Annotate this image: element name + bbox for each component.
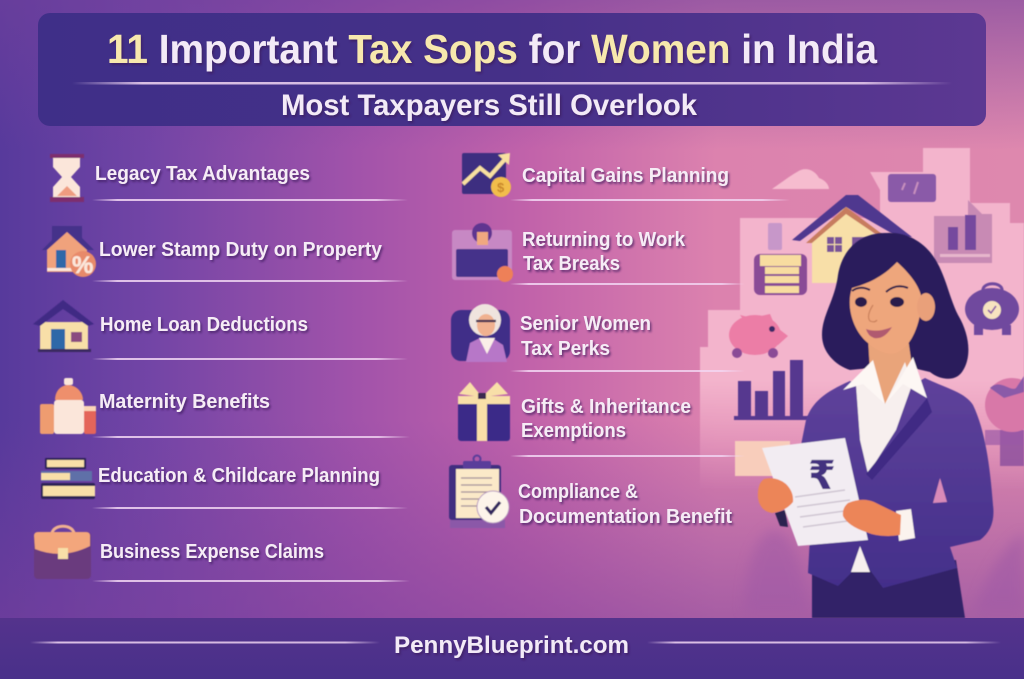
- label: legacy tax advantages: Legacy Tax Advantages: [95, 162, 310, 185]
- right hand: [843, 500, 901, 536]
- label: senior women: Tax Perks: [521, 337, 610, 360]
- icon: growth chart with coin: [462, 153, 511, 197]
- icon: cloud: [772, 169, 829, 189]
- icon: gift: [458, 382, 510, 441]
- woman illustration: [758, 233, 993, 618]
- nose: [869, 305, 877, 322]
- label: returning to work: [522, 228, 686, 275]
- label: compliance and documentation: Compliance &: [518, 480, 638, 503]
- icon: document stack: [754, 223, 807, 295]
- label: capital gains planning: Capital Gains Planning: [522, 164, 729, 187]
- icon: books: [41, 458, 95, 499]
- subtitle: Most Taxpayers Still Overlook: [281, 89, 697, 122]
- footer text: PennyBlueprint.com: [394, 632, 629, 659]
- cuff: [896, 509, 915, 541]
- icon: home: [33, 300, 94, 352]
- background scene: pale city shapes: [700, 148, 1024, 613]
- icon: baby bottle and items: [40, 378, 96, 434]
- title: 11 Important Tax Sops for Women in India: [107, 26, 878, 72]
- label: maternity benefits: Maternity Benefits: [99, 390, 270, 413]
- icon: tree with bird: [985, 376, 1024, 466]
- dividers: [92, 199, 790, 582]
- neck: [868, 338, 912, 404]
- left sleeve end: [775, 510, 788, 527]
- icon: growth chart with coin: $: [497, 180, 505, 195]
- icon: bar chart card: [934, 200, 992, 263]
- lower shirt: [851, 546, 870, 572]
- jacket: [800, 378, 993, 588]
- label: education and childcare: Education & Childcare Planning: [98, 464, 380, 487]
- icon: working woman with briefcase: [452, 223, 513, 282]
- trousers: [812, 560, 965, 618]
- label: gifts and inheritance: Exemptions: [521, 419, 626, 442]
- icon: calendar: [888, 174, 936, 202]
- icon: clipboard with check: [449, 456, 509, 528]
- brows: [852, 286, 908, 292]
- lapel: [866, 398, 932, 480]
- icon: piggy bank: [729, 314, 788, 358]
- icon: house with percent: %: [72, 252, 93, 279]
- icon: hourglass: [50, 154, 84, 202]
- label: senior women: [520, 312, 651, 360]
- icon: bar chart: [734, 360, 809, 420]
- document: [762, 438, 868, 546]
- icon: money bag with clock: [965, 284, 1019, 335]
- label: returning to work: Returning to Work: [522, 228, 686, 251]
- label: gifts and inheritance: [521, 395, 691, 442]
- face: [850, 262, 922, 354]
- label: returning to work: Tax Breaks: [523, 252, 620, 275]
- jacket arm gap: [933, 478, 947, 503]
- icon: house with percent: [42, 226, 96, 279]
- footer band: [0, 618, 1024, 679]
- mouth: [866, 327, 892, 338]
- icon: briefcase: [34, 526, 91, 579]
- header panel: [38, 13, 986, 126]
- label: senior women: Senior Women: [520, 312, 651, 335]
- label: business expense claims: Business Expense Claims: [100, 540, 324, 563]
- label: compliance and documentation: [518, 480, 732, 528]
- shirt: [856, 362, 912, 474]
- eyes: [855, 297, 867, 307]
- label: lower stamp duty: Lower Stamp Duty on Property: [99, 238, 383, 261]
- ear: [917, 293, 935, 321]
- icon: senior woman: [451, 304, 510, 362]
- label: home loan deductions: Home Loan Deductions: [100, 313, 308, 336]
- left hand: [758, 478, 793, 513]
- collar: [843, 357, 927, 404]
- icon: house behind the woman: [792, 195, 912, 283]
- hair: [822, 233, 968, 379]
- label: compliance and documentation: Documentation Benefit: [519, 505, 732, 528]
- rupee symbol: ₹: [808, 453, 836, 499]
- label: gifts and inheritance: Gifts & Inheritance: [521, 395, 691, 418]
